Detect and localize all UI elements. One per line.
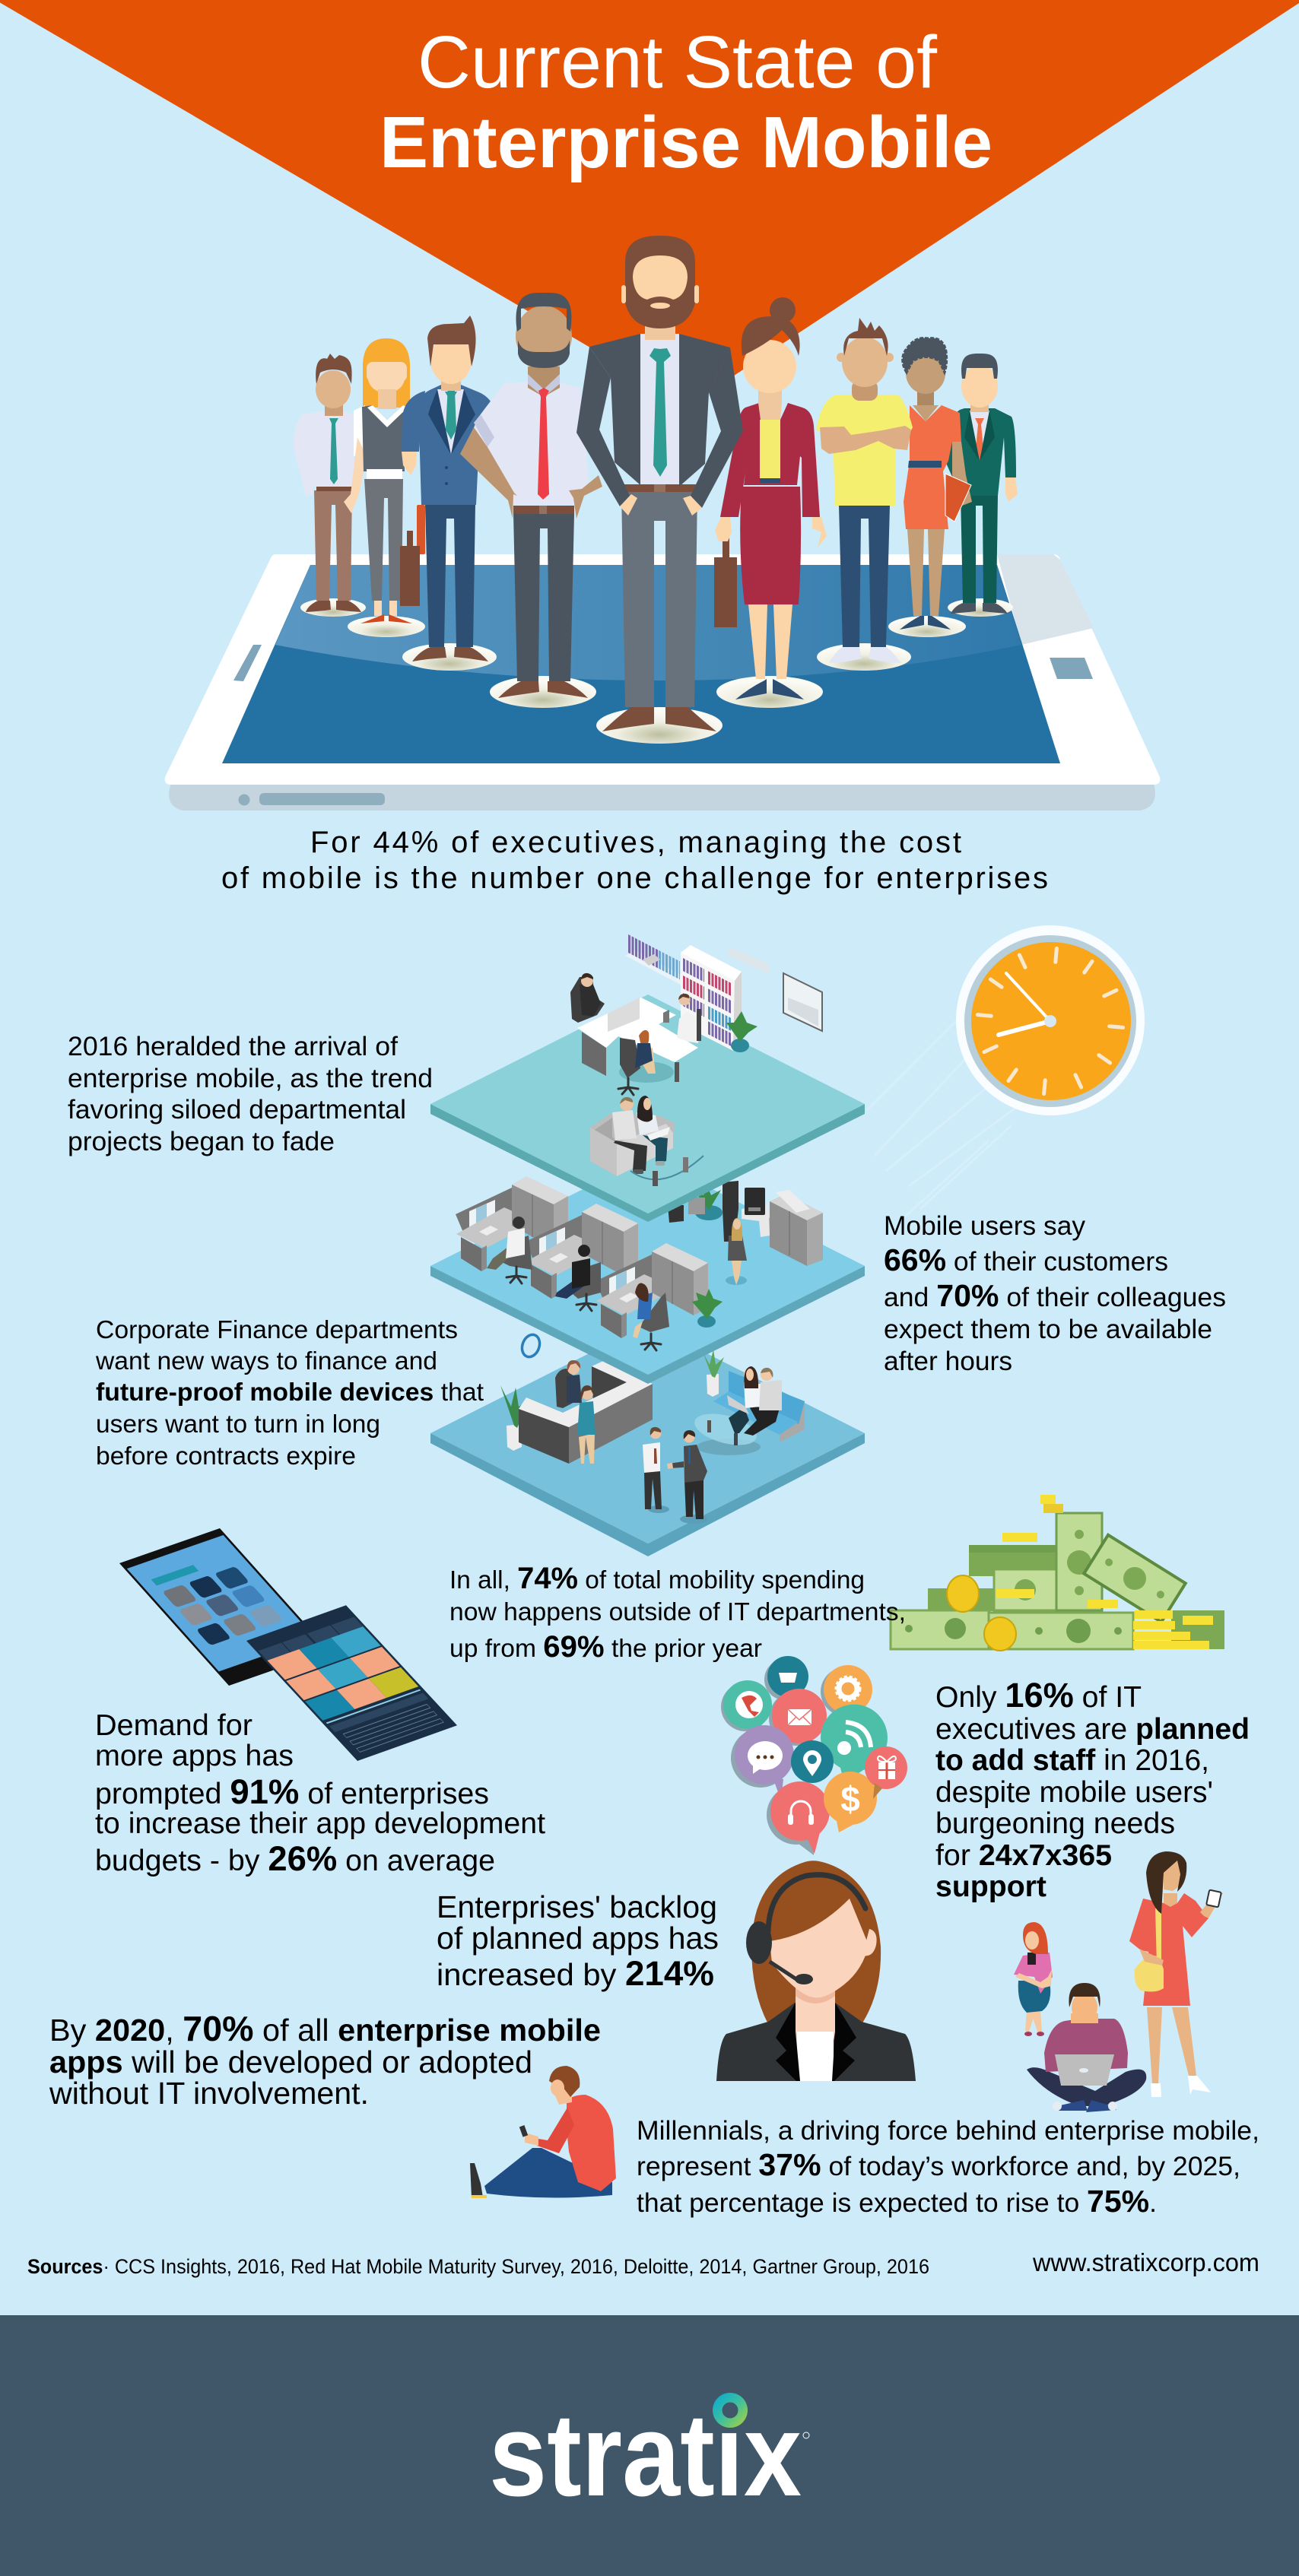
dark smartphone — [246, 1605, 457, 1761]
plant — [726, 1011, 757, 1052]
foot platforms — [300, 598, 1013, 744]
isometric office: ground floor — [430, 1324, 865, 1556]
money pile — [891, 1495, 1224, 1651]
text: millennials: Millennials, a driving force behind enterprise mobile, — [637, 2115, 1259, 2146]
website: www.stratixcorp.com — [1032, 2248, 1259, 2276]
cubicles — [456, 1176, 568, 1271]
person: man in white shirt, brown trousers — [294, 354, 361, 612]
two men talking — [643, 1427, 707, 1524]
wall unit — [729, 947, 770, 974]
text: 2016 arrival: enterprise mobile, as the trend — [68, 1063, 433, 1093]
person: blonde woman in vest — [344, 338, 425, 623]
bubble: basket — [767, 1656, 808, 1697]
text: 2016 arrival — [68, 1031, 433, 1156]
footer band — [0, 2315, 1299, 2576]
text: 2020 prediction — [49, 2009, 601, 2111]
bubble: dollar: $ — [840, 1779, 860, 1819]
person: woman in red dress with briefcase — [714, 297, 827, 700]
L-shaped desk group — [570, 973, 701, 1095]
text: app demand — [95, 1709, 545, 1878]
text: after hours: and 70% of their colleagues — [884, 1278, 1226, 1313]
text: corporate finance: Corporate Finance departments — [96, 1315, 458, 1344]
stratix logo: stratix — [489, 2389, 802, 2520]
support agent with headset — [716, 1861, 916, 2081]
text: corporate finance: users want to turn in long — [96, 1410, 380, 1439]
plant right — [703, 1350, 724, 1397]
text: app demand: to increase their app development — [95, 1807, 545, 1840]
text: 2016 arrival: favoring siloed departmental — [68, 1094, 406, 1125]
text: 2016 arrival: projects began to fade — [68, 1126, 335, 1156]
wall picture — [783, 973, 822, 1031]
sofa with two people — [590, 1096, 675, 1176]
standing people and plant — [668, 1181, 747, 1285]
coffee station — [742, 1188, 770, 1237]
sources: Sources· CCS Insights, 2016, Red Hat Mobile Maturity Survey, 2016, Deloitte, 2014, Gartner Group, 2016 — [27, 2255, 929, 2278]
bubble: dollar — [824, 1772, 877, 1832]
text: millennials: represent 37% of today’s workforce and, by 2025, — [637, 2147, 1240, 2182]
title — [380, 21, 993, 183]
bubble: headphones — [770, 1781, 830, 1854]
standing woman with phone — [1129, 1851, 1223, 2097]
text: corporate finance: want new ways to finance and — [95, 1347, 437, 1375]
text: app demand: more apps has — [95, 1740, 294, 1772]
text: backlog: of planned apps has — [437, 1921, 719, 1956]
text: corporate finance: future-proof mobile devices that — [96, 1378, 484, 1407]
icon: small blue clock — [519, 1332, 542, 1359]
text: backlog — [437, 1889, 719, 1993]
bubble: gift — [865, 1746, 907, 1799]
reception desk — [519, 1360, 653, 1464]
text: IT staffing: burgeoning needs — [935, 1807, 1175, 1840]
person: woman in orange dress — [900, 338, 972, 630]
plant left — [500, 1385, 529, 1451]
text: app demand: prompted 91% of enterprises — [95, 1772, 489, 1811]
text: 2020 prediction: apps will be developed or adopted — [49, 2045, 532, 2080]
isometric office: middle floor — [430, 1156, 865, 1384]
light smartphone — [119, 1528, 329, 1686]
text: IT staffing: for 24x7x365 — [935, 1839, 1112, 1872]
millennials group — [1014, 1851, 1223, 2112]
bubble: chat — [735, 1725, 794, 1800]
seated girl with phone — [1014, 1922, 1053, 2036]
text: mobility spending: In all, 74% of total mobility spending — [449, 1562, 865, 1595]
text: after hours — [884, 1210, 1226, 1376]
text: IT staffing: executives are planned — [935, 1713, 1250, 1746]
isometric office: top floor — [430, 944, 865, 1222]
text: 2016 arrival: 2016 heralded the arrival of — [68, 1031, 398, 1061]
bubble: gear — [824, 1665, 872, 1714]
printer cabinets — [770, 1190, 823, 1266]
text: 2020 prediction: without IT involvement. — [49, 2076, 369, 2111]
text: after hours: Mobile users say — [884, 1210, 1085, 1241]
seated man with laptop — [1027, 1983, 1146, 2112]
tablet device — [165, 554, 1160, 811]
subtitle: For 44% of executives, managing the cost — [310, 826, 961, 859]
text: 2020 prediction: By 2020, 70% of all enterprise mobile — [49, 2009, 601, 2048]
person: man in yellow t-shirt — [816, 318, 913, 663]
text: mobility spending — [449, 1562, 906, 1664]
waiting sofa and table — [691, 1366, 805, 1455]
icon bubbles — [721, 1656, 907, 1855]
person: man with dark beard and red tie — [460, 293, 602, 698]
text: millennials: that percentage is expected to rise to 75%. — [637, 2184, 1157, 2219]
bookcase — [681, 945, 742, 1051]
person: central bearded man in dark suit — [576, 236, 743, 731]
person: man in blue suit — [402, 316, 500, 661]
wall shelf with binders — [625, 944, 681, 985]
text: IT staffing — [935, 1676, 1250, 1903]
text: millennials — [637, 2115, 1259, 2219]
text: corporate finance — [95, 1315, 484, 1470]
big orange clock — [867, 925, 1145, 1217]
text: app demand: budgets - by 26% on average — [95, 1839, 495, 1878]
person: man in green suit — [943, 354, 1018, 614]
worker in blue dress — [633, 1283, 669, 1350]
worker in black shirt — [555, 1245, 601, 1311]
subtitle: of mobile is the number one challenge for enterprises — [221, 861, 1048, 895]
text: IT staffing: despite mobile users' — [935, 1776, 1213, 1809]
text: backlog: increased by 214% — [437, 1954, 714, 1993]
text: corporate finance: before contracts expire — [96, 1442, 356, 1470]
text: mobility spending: now happens outside of IT departments, — [449, 1598, 906, 1626]
floor plant — [692, 1289, 723, 1328]
seated man in red hoodie — [470, 2066, 616, 2198]
text: backlog: Enterprises' backlog — [437, 1889, 717, 1924]
bubble: wifi — [821, 1705, 888, 1783]
text: IT staffing: to add staff in 2016, — [935, 1744, 1209, 1777]
orange header triangle — [0, 0, 1299, 405]
text: IT staffing: support — [935, 1870, 1047, 1903]
bubble: globe — [723, 1680, 772, 1729]
text: app demand: Demand for — [95, 1709, 252, 1742]
bubble: location pin — [791, 1740, 834, 1783]
text: after hours: 66% of their customers — [884, 1242, 1168, 1277]
glass table — [630, 1156, 703, 1186]
bubble: mail — [772, 1689, 827, 1743]
text: IT staffing: Only 16% of IT — [935, 1676, 1142, 1715]
title: Current State of — [418, 21, 938, 103]
worker in white shirt — [487, 1217, 532, 1283]
title: Enterprise Mobile — [380, 102, 993, 183]
text: after hours: expect them to be available — [884, 1314, 1212, 1344]
text: after hours: after hours — [884, 1346, 1012, 1376]
text: mobility spending: up from 69% the prior year — [449, 1630, 762, 1664]
subtitle — [221, 826, 1048, 895]
